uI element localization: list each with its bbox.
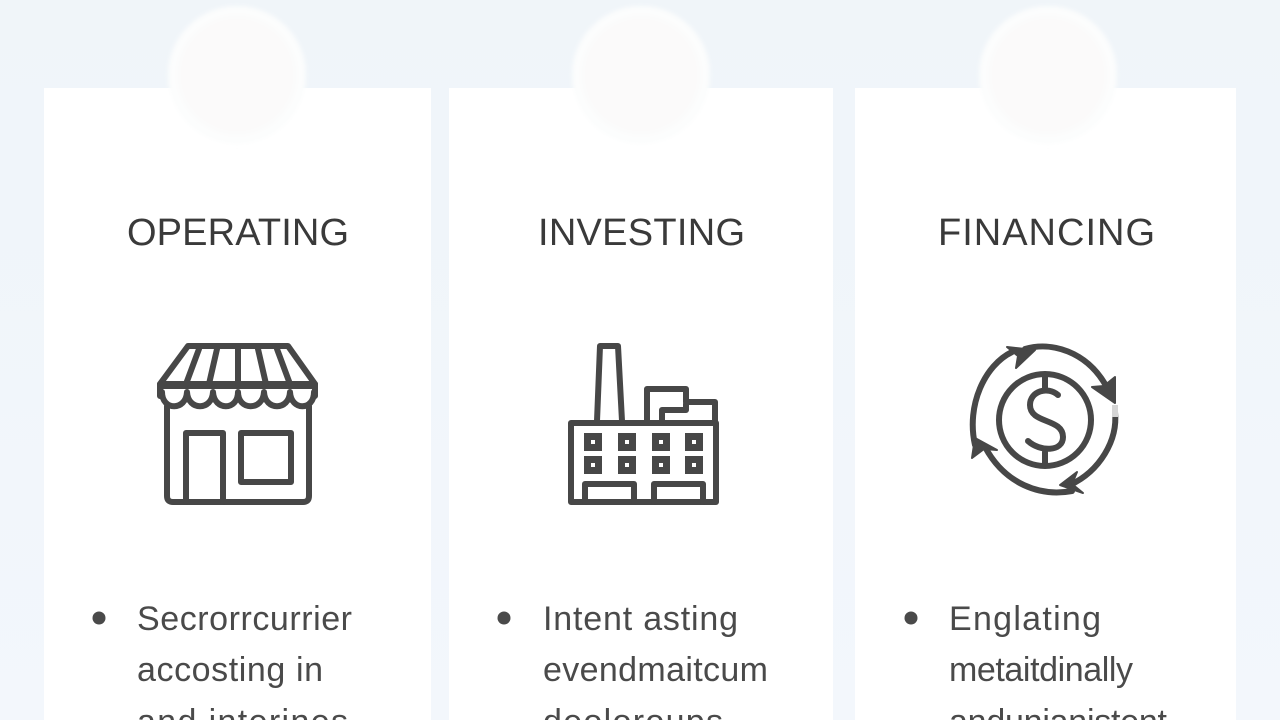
panel: financing: [855, 6, 1236, 720]
icon: storefront: [160, 346, 315, 502]
financing bullet list: metaitdinally: [949, 651, 1133, 689]
investing badge circle: [572, 6, 710, 144]
financing card: [855, 88, 1236, 720]
investing bullet list: [498, 600, 768, 720]
operating badge circle: [168, 6, 306, 144]
bullet: [92, 612, 106, 624]
financing bullet list: [904, 600, 1168, 720]
bullet: [904, 612, 918, 624]
investing heading: INVESTING: [538, 212, 745, 254]
operating bullet list: Secrorrcurrier: [137, 600, 352, 638]
operating heading: OPERATING: [127, 212, 349, 254]
panel: operating: [44, 6, 431, 720]
icon: factory: [571, 346, 716, 502]
investing card: [449, 88, 833, 720]
panel: investing: [449, 6, 833, 720]
operating bullet list: accosting in: [137, 651, 323, 689]
operating bullet list: [92, 600, 352, 720]
investing bullet list: Intent asting: [543, 600, 738, 638]
financing badge circle: [979, 6, 1117, 144]
bullet: [498, 612, 510, 624]
operating card: [44, 88, 431, 720]
financing heading: FINANCING: [938, 212, 1155, 254]
financing bullet list: Englating: [949, 600, 1101, 638]
investing bullet list: evendmaitcum: [543, 651, 768, 689]
icon: dollar with circular arrows: [972, 346, 1118, 493]
arrow ring highlight: [1112, 405, 1118, 417]
